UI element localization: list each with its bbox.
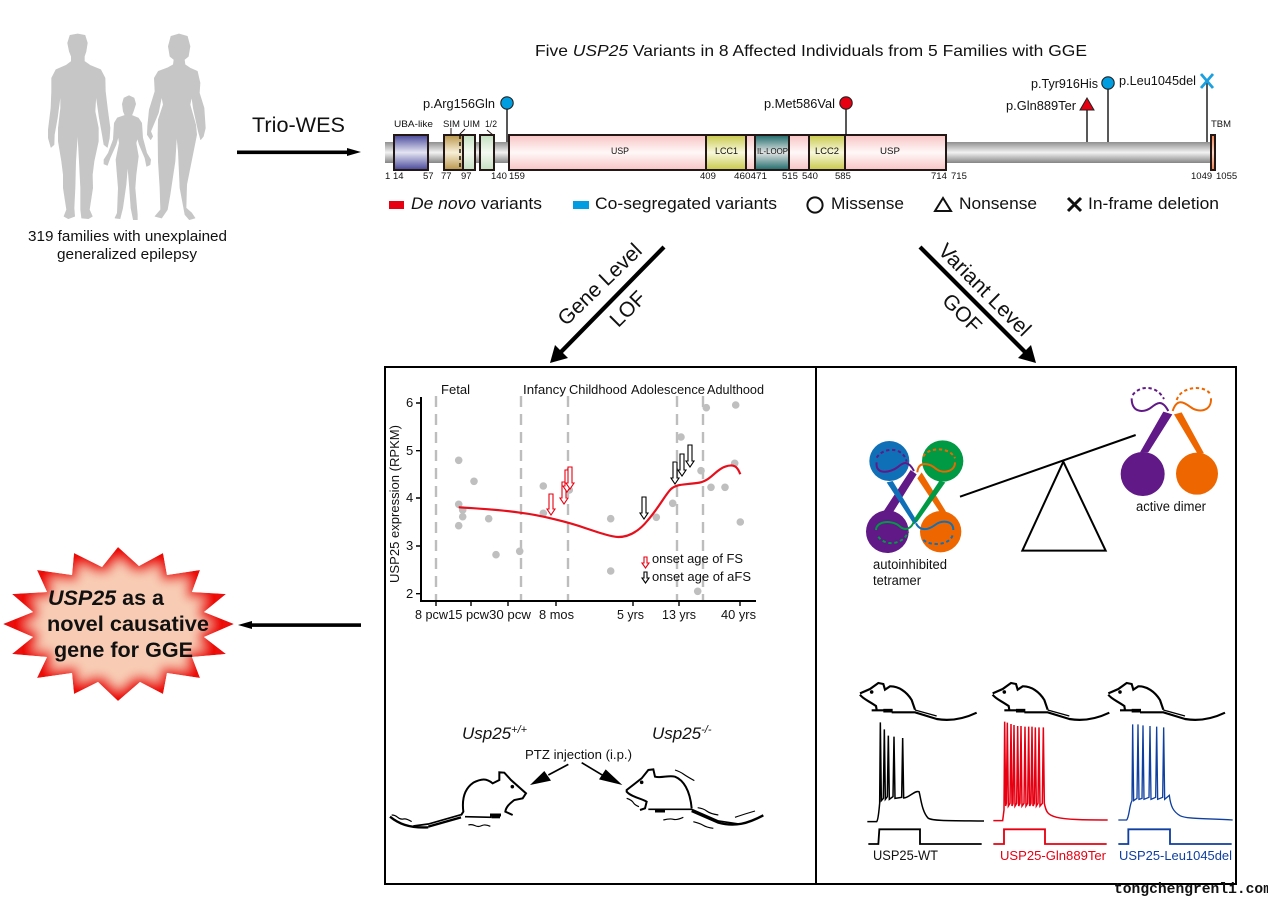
panel frame xyxy=(385,367,1236,884)
legend: variant types: De novo variants xyxy=(411,194,542,213)
label: gene level LOF: LOF xyxy=(606,287,651,332)
cohort caption: 319 families with unexplained xyxy=(28,228,227,245)
chart: USP25 expression over development: 5 yrs xyxy=(617,607,644,622)
chart: USP25 expression over development: Adulthood xyxy=(707,382,764,397)
protein domain diagram: 460471 xyxy=(734,171,767,182)
legend: variant types: Nonsense xyxy=(959,194,1037,213)
chart: USP25 expression over development: 30 pcw xyxy=(489,607,532,622)
knockout mice with PTZ injection: PTZ injection (i.p.) xyxy=(525,747,632,762)
variant: p.Tyr916His: p.Tyr916His xyxy=(1031,76,1098,91)
variant: p.Met586Val xyxy=(764,96,852,135)
labels: tetramer and dimer: active dimer xyxy=(1136,499,1206,514)
variant: p.Arg156Gln: p.Arg156Gln xyxy=(423,96,495,111)
protein domain diagram: IL-LOOP xyxy=(757,147,788,156)
chart: USP25 expression over development: 8 mos xyxy=(539,607,574,622)
autoinhibited tetramer xyxy=(866,440,963,553)
label: Trio-WES: Trio-WES xyxy=(252,114,345,137)
labels: tetramer and dimer xyxy=(873,499,1206,588)
active dimer xyxy=(1121,388,1218,496)
protein domain diagram: 1 xyxy=(385,171,390,182)
knockout mice with PTZ injection: +/+ xyxy=(511,724,528,736)
protein domain diagram: 585 xyxy=(835,171,851,182)
protein domain diagram: 1049 xyxy=(1191,171,1212,182)
chart: USP25 expression over development: 4 xyxy=(406,490,413,505)
variant: p.Leu1045del: p.Leu1045del xyxy=(1119,73,1196,88)
protein domain diagram: 97 xyxy=(461,171,472,182)
variant: p.Met586Val: p.Met586Val xyxy=(764,96,835,111)
knockout mice with PTZ injection: Usp25 xyxy=(652,724,701,743)
labels: tetramer and dimer: tetramer xyxy=(873,573,921,588)
label: variant level GOF: Variant Level xyxy=(933,239,1035,341)
callout: conclusion starburst xyxy=(3,547,234,701)
callout: conclusion starburst: USP25 as a xyxy=(48,586,165,610)
label: gene level LOF: Gene Level xyxy=(553,239,647,330)
protein domain diagram: UBA-like xyxy=(394,119,433,130)
arrow: to conclusion xyxy=(238,621,361,629)
legend: variant types: In-frame deletion xyxy=(1088,194,1219,213)
protein domain diagram: 57 xyxy=(423,171,434,182)
legend: variant types: Co-segregated variants xyxy=(595,194,777,213)
protein domain diagram: 714 xyxy=(931,171,947,182)
protein domain diagram: 540 xyxy=(802,171,818,182)
electrophysiology: USP25-WT xyxy=(860,683,984,844)
protein domain diagram: LCC1 xyxy=(715,146,738,157)
chart: USP25 expression over development: onset age of FS xyxy=(652,551,743,566)
variant: p.Gln889Ter: p.Gln889Ter xyxy=(1006,98,1077,113)
protein domain diagram: 515 xyxy=(782,171,798,182)
balance beam and fulcrum xyxy=(960,435,1136,551)
knockout mice with PTZ injection: Usp25 xyxy=(462,724,511,743)
chart: USP25 expression over development: 8 pcw xyxy=(415,607,449,622)
legend: variant types: Missense xyxy=(831,194,904,213)
watermark: tongchengrenli.com xyxy=(1114,882,1268,898)
arrow: variant level xyxy=(920,247,1036,363)
trace labels: USP25-Leu1045del xyxy=(1119,848,1232,863)
electrophysiology: USP25-Gln889Ter xyxy=(993,683,1109,844)
chart: USP25 expression over development: Fetal xyxy=(441,382,470,397)
chart: USP25 expression over development: Infancy xyxy=(523,382,567,397)
variant: p.Leu1045del xyxy=(1119,73,1213,142)
arrow: trio-WES to variants xyxy=(237,148,361,156)
chart: USP25 expression over development: 3 xyxy=(406,538,413,553)
knockout mice with PTZ injection xyxy=(390,724,763,828)
protein domain diagram: UIM xyxy=(463,119,480,130)
chart: USP25 expression over development: Adolescence xyxy=(631,382,705,397)
electrophysiology: USP25-Leu1045del xyxy=(1108,683,1233,844)
protein domain diagram: LCC2 xyxy=(815,146,839,157)
labels: tetramer and dimer: autoinhibited xyxy=(873,557,947,572)
label: variant level GOF: GOF xyxy=(937,289,986,338)
protein domain diagram: 1055 xyxy=(1216,171,1237,182)
cohort caption xyxy=(28,228,227,263)
protein domain diagram: 409 xyxy=(700,171,716,182)
arrow: gene level xyxy=(550,247,664,363)
title: Five USP25 Variants in 8 Affected Individuals from 5 Families with GGE xyxy=(535,43,1087,60)
protein domain diagram xyxy=(385,119,1237,182)
protein domain diagram: 1/2 xyxy=(485,119,497,130)
knockout mice with PTZ injection: -/- xyxy=(701,724,712,736)
protein domain diagram: 14 xyxy=(393,171,404,182)
chart: USP25 expression over development: Childhood xyxy=(569,382,627,397)
family silhouettes xyxy=(48,34,205,220)
protein domain diagram: SIM xyxy=(443,119,460,130)
diagram: tetramer-dimer balance xyxy=(866,388,1218,553)
variant: p.Tyr916His xyxy=(1031,76,1114,142)
legend: variant types xyxy=(389,194,1219,213)
trace labels: USP25-WT xyxy=(873,848,938,863)
chart: USP25 expression over development: 5 xyxy=(406,443,413,458)
chart: USP25 expression over development: 15 pcw xyxy=(448,607,490,622)
chart: USP25 expression over development: 6 xyxy=(406,395,413,410)
trace labels: USP25-Gln889Ter xyxy=(1000,848,1107,863)
variant: p.Arg156Gln xyxy=(423,96,513,142)
cohort caption: generalized epilepsy xyxy=(57,246,198,263)
variant: p.Gln889Ter xyxy=(1006,98,1094,142)
chart: USP25 expression over development: USP25 expression (RPKM) xyxy=(387,425,402,583)
protein domain diagram: 140 xyxy=(491,171,507,182)
chart: USP25 expression over development: 13 yrs xyxy=(662,607,696,622)
chart: USP25 expression over development xyxy=(387,382,764,622)
protein domain diagram: USP xyxy=(611,146,629,157)
protein domain diagram: 159 xyxy=(509,171,525,182)
protein domain diagram: 77 xyxy=(441,171,452,182)
protein domain diagram: TBM xyxy=(1211,119,1231,130)
callout: conclusion starburst: gene for GGE xyxy=(54,638,193,662)
callout: conclusion starburst: novel causative xyxy=(47,612,209,636)
chart: USP25 expression over development: 2 xyxy=(406,586,413,601)
protein domain diagram: 715 xyxy=(951,171,967,182)
chart: USP25 expression over development: onset age of aFS xyxy=(652,569,751,584)
protein domain diagram: USP xyxy=(880,146,900,157)
trace labels xyxy=(873,848,1232,863)
chart: USP25 expression over development: 40 yrs xyxy=(721,607,756,622)
